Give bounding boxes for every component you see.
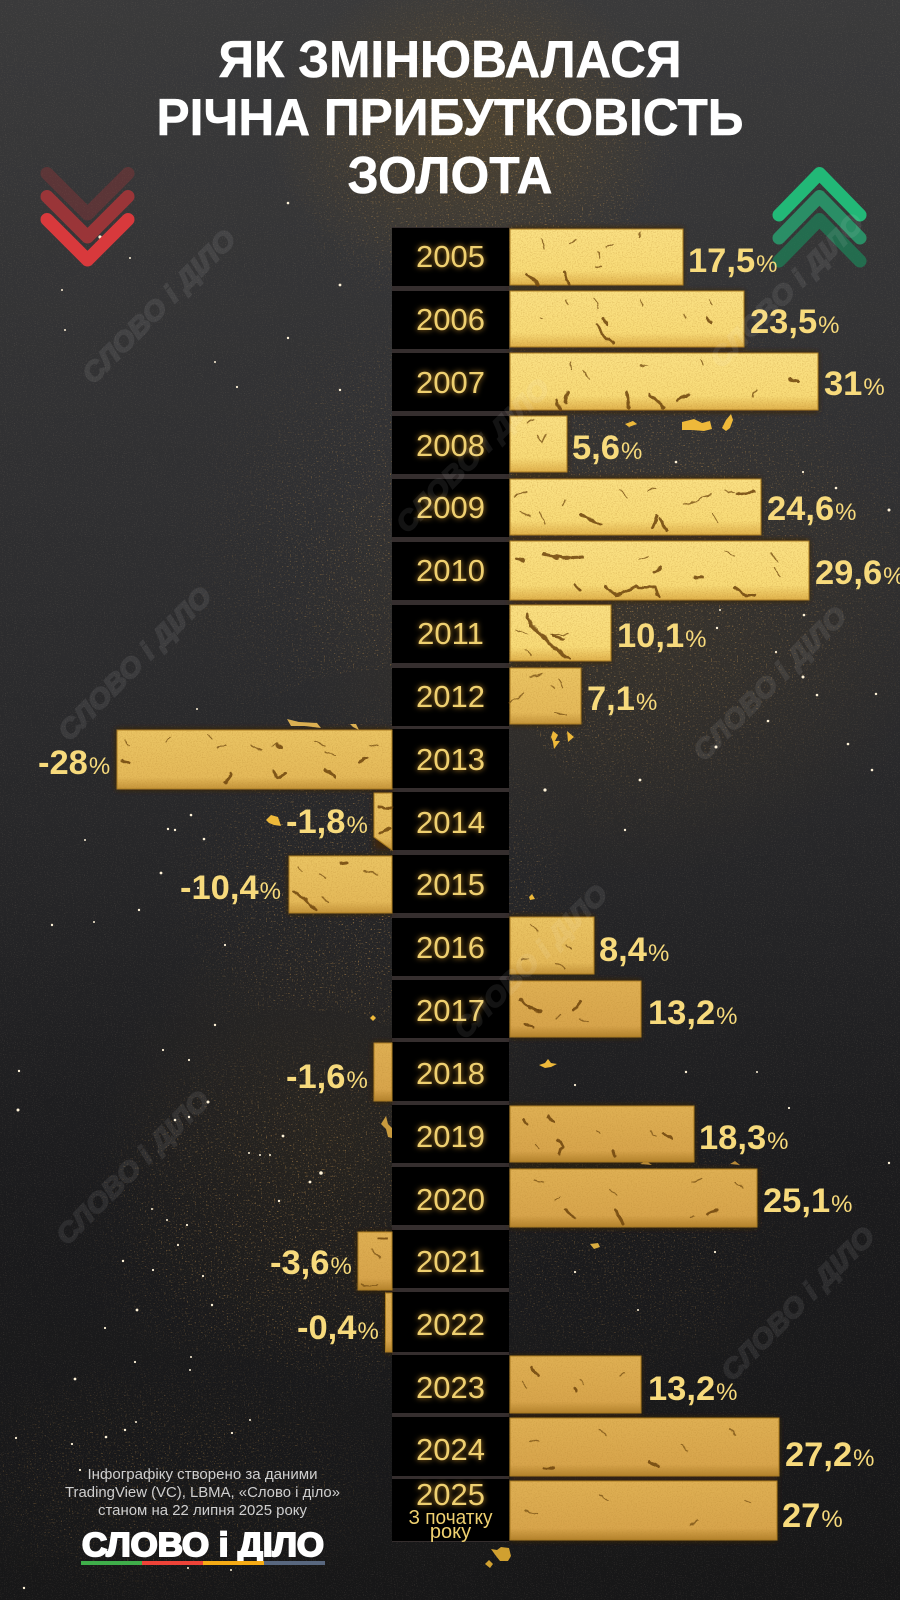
row 2019: 2019 <box>416 1119 485 1154</box>
source note <box>65 1467 340 1519</box>
row 2012 <box>392 668 657 726</box>
row 2025: року <box>430 1521 471 1543</box>
row 2021: -3,6% <box>270 1244 352 1282</box>
row 2009 <box>392 479 856 537</box>
row 2016: 8,4% <box>599 931 669 969</box>
row 2010: 2010 <box>416 553 485 588</box>
row 2014: -1,8% <box>286 803 368 841</box>
row 2025: 2025 <box>416 1477 485 1512</box>
row 2007: 31% <box>824 365 885 403</box>
row 2023 <box>392 1355 738 1413</box>
source note: TradingView (VC), LBMA, «Слово і діло» <box>65 1485 340 1501</box>
row 2010 <box>392 541 900 600</box>
row 2020: 2020 <box>416 1182 485 1217</box>
row 2023: 13,2% <box>648 1370 738 1408</box>
row 2008: 5,6% <box>572 429 642 467</box>
watermarks: СЛОВО і ДІЛО <box>76 224 241 389</box>
row 2019 <box>392 1105 788 1163</box>
row 2009: 24,6% <box>767 490 856 528</box>
title: ЗОЛОТА <box>348 147 552 205</box>
watermarks: СЛОВО і ДІЛО <box>52 581 217 746</box>
row 2022 <box>297 1292 509 1352</box>
row 2006: 2006 <box>416 302 485 337</box>
row 2014: 2014 <box>416 805 485 840</box>
row 2013: 2013 <box>416 742 485 777</box>
watermarks: СЛОВО і ДІЛО <box>687 601 852 766</box>
row 2016 <box>392 917 669 976</box>
row 2021: 2021 <box>416 1244 485 1279</box>
title <box>156 31 744 205</box>
row 2025 <box>392 1477 843 1543</box>
row 2012: 7,1% <box>587 680 657 718</box>
row 2023: 2023 <box>416 1370 485 1405</box>
row 2008: 2008 <box>416 428 485 463</box>
row 2006 <box>392 291 840 349</box>
icon: red chevrons down <box>47 174 128 260</box>
watermarks: СЛОВО і ДІЛО <box>715 1221 880 1386</box>
row 2017 <box>392 980 738 1038</box>
row 2013 <box>38 729 509 789</box>
watermarks: СЛОВО і ДІЛО <box>704 208 869 373</box>
row 2008 <box>392 416 642 474</box>
note: since start of year: З початку <box>408 1507 492 1529</box>
row 2019: 18,3% <box>699 1119 788 1157</box>
row 2009: 2009 <box>416 490 485 525</box>
source note: станом на 22 липня 2025 року <box>98 1503 308 1519</box>
row 2011: 10,1% <box>617 617 706 655</box>
row 2012: 2012 <box>416 679 485 714</box>
source note: Інфографіку створено за даними <box>88 1467 318 1483</box>
row 2015: -10,4% <box>180 869 281 907</box>
row 2022: 2022 <box>416 1307 485 1342</box>
row 2024 <box>392 1417 874 1476</box>
row 2018: 2018 <box>416 1056 485 1091</box>
bar halos <box>116 228 818 1541</box>
row 2022: -0,4% <box>297 1309 379 1347</box>
row 2013: -28% <box>38 744 110 782</box>
row 2011: 2011 <box>417 616 484 651</box>
watermarks: СЛОВО і ДІЛО <box>448 879 613 1044</box>
gold flakes <box>266 414 740 1568</box>
row 2016: 2016 <box>416 930 485 965</box>
row 2006: 23,5% <box>750 303 840 341</box>
row 2020: 25,1% <box>763 1182 852 1220</box>
row 2020 <box>392 1167 852 1227</box>
row 2018: -1,6% <box>286 1058 368 1096</box>
watermarks: СЛОВО і ДІЛО <box>390 373 555 538</box>
row 2017: 2017 <box>416 993 485 1028</box>
row 2007: 2007 <box>416 365 485 400</box>
row 2017: 13,2% <box>648 994 738 1032</box>
row 2005 <box>392 228 778 286</box>
row 2005: 2005 <box>416 239 485 274</box>
row 2024: 27,2% <box>785 1436 874 1474</box>
row 2021 <box>270 1230 509 1290</box>
row 2015 <box>180 855 509 913</box>
title: ЯК ЗМІНЮВАЛАСЯ <box>218 31 682 89</box>
row 2011 <box>392 605 706 663</box>
row 2018 <box>286 1042 509 1101</box>
logo: Слово і діло: СЛОВО і ДІЛО <box>82 1526 324 1563</box>
year column backing <box>392 227 509 1542</box>
icon: green chevrons up <box>779 174 860 261</box>
row 2024: 2024 <box>416 1432 485 1467</box>
row 2007 <box>392 353 885 411</box>
watermarks: СЛОВО і ДІЛО <box>50 1085 215 1250</box>
title: РІЧНА ПРИБУТКОВІСТЬ <box>156 89 744 147</box>
row 2025: 27% <box>782 1497 843 1535</box>
watermarks <box>50 208 880 1386</box>
row 2015: 2015 <box>416 867 485 902</box>
row 2005: 17,5% <box>688 242 778 280</box>
row 2014 <box>286 792 509 850</box>
